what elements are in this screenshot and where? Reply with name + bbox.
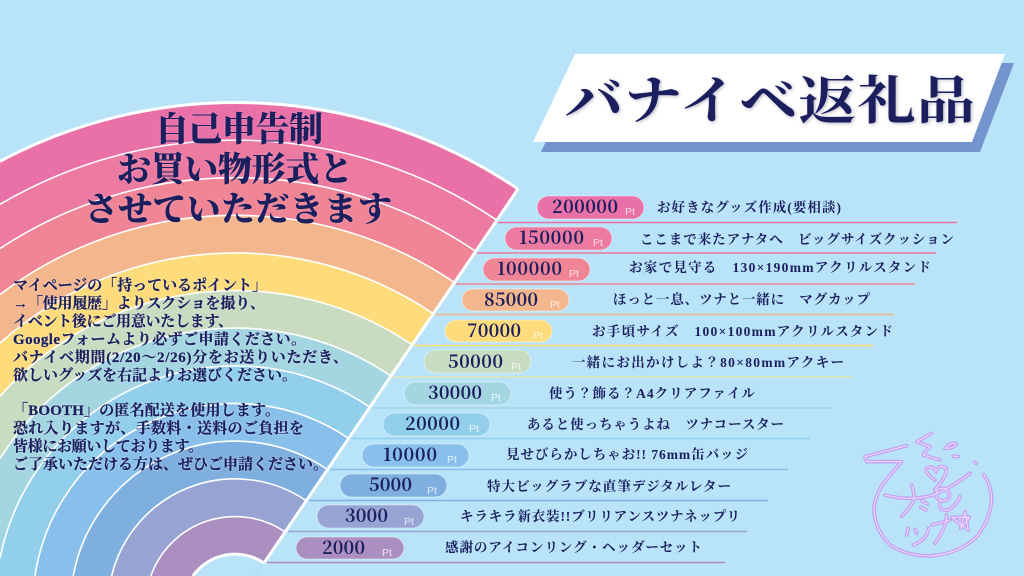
- reward row: 2000: 2000: [322, 534, 365, 560]
- reward row: 50000: Pt: [511, 361, 521, 373]
- reward row: 85000: Pt: [550, 299, 560, 311]
- heading: self-application notice: お買い物形式と: [117, 151, 353, 189]
- reward row: 200000: お好きなグッズ作成(要相談): [657, 199, 841, 215]
- reward row: 200000: [498, 193, 957, 222]
- panel: rainbow fan: [0, 103, 518, 576]
- reward row: 3000: [288, 502, 747, 532]
- icon: handwritten signature: [865, 433, 992, 556]
- reward row: 200000: 200000: [552, 193, 618, 219]
- reward row: 2000: Pt: [382, 547, 392, 559]
- text block: shipping notes: 「BOOTH」の匿名配送を使用します。: [13, 401, 280, 419]
- text block: how to apply: 欲しいグッズを右記よりお選びください。: [13, 366, 297, 384]
- reward row: 2000: [267, 534, 725, 562]
- reward row: 2000: 感謝のアイコンリング・ヘッダーセット: [445, 539, 702, 555]
- text block: how to apply: [13, 276, 348, 384]
- reward row: 200000: Pt: [625, 206, 635, 218]
- reward row: 10000: 10000: [383, 441, 437, 467]
- reward row: 3000: Pt: [404, 516, 414, 528]
- reward row: 85000: 85000: [484, 286, 538, 312]
- text block: how to apply: Googleフォームより必ずご申請ください。: [13, 330, 306, 348]
- heading: self-application notice: させていただきます: [84, 192, 392, 229]
- title banner: バナイベ返礼品: [565, 73, 975, 130]
- heading: self-application notice: 自己申告制: [155, 111, 323, 149]
- reward row: 10000: 見せびらかしちゃお!! 76mm缶バッジ: [506, 446, 748, 462]
- text block: shipping notes: [13, 401, 328, 473]
- reward row: 150000: [477, 224, 954, 253]
- reward row: 150000: ここまで来たアナタへ ビッグサイズクッション: [640, 231, 954, 247]
- text block: shipping notes: 皆様にお願いしております。: [13, 437, 203, 455]
- reward row: 150000: Pt: [593, 237, 603, 249]
- text block: how to apply: バナイベ期間(2/20～2/26)分をお送りいただき、: [13, 348, 348, 366]
- reward row: 30000: 30000: [428, 379, 482, 405]
- reward row: 30000: [372, 379, 831, 408]
- text block: shipping notes: 恐れ入りますが、手数料・送料のご負担を: [13, 419, 304, 437]
- reward row: 70000: Pt: [533, 330, 543, 342]
- reward row: 5000: Pt: [427, 485, 437, 497]
- reward row: 100000: [456, 255, 931, 284]
- reward row: 50000: [393, 348, 853, 377]
- reward row: 10000: [330, 441, 788, 470]
- reward row: 100000: 100000: [497, 255, 562, 281]
- reward row: 150000: 150000: [519, 224, 584, 250]
- reward row: 10000: Pt: [447, 454, 457, 466]
- reward row: 50000: 一緒にお出かけしよ？80×80mmアクキー: [572, 354, 844, 370]
- reward row: 20000: 20000: [405, 410, 460, 436]
- reward row: 5000: 5000: [369, 471, 412, 497]
- text block: how to apply: マイページの「持っているポイント」: [13, 276, 267, 294]
- reward row: 70000: [414, 317, 893, 346]
- reward row: 5000: [309, 471, 768, 500]
- reward row: 85000: [435, 286, 894, 314]
- reward row: 100000: お家で見守る 130×190mmアクリルスタンド: [629, 259, 931, 275]
- reward row: 50000: 50000: [448, 348, 503, 374]
- reward row: 20000: [351, 410, 810, 438]
- text block: shipping notes: ご了承いただける方は、ぜひご申請ください。: [13, 455, 328, 473]
- reward row: 30000: 使う？飾る？A4クリアファイル: [549, 385, 756, 401]
- reward row: 20000: あると使っちゃうよね ツナコースター: [527, 416, 784, 432]
- reward row: 85000: ほっと一息、ツナと一緒に マグカップ: [613, 291, 870, 307]
- text block: how to apply: イベント後にご用意いたします、: [13, 312, 233, 330]
- reward row: 20000: Pt: [469, 423, 479, 435]
- reward row: 3000: キラキラ新衣装!!ブリリアンスツナネップリ: [460, 508, 740, 524]
- reward row: 5000: 特大ビッグラブな直筆デジタルレター: [487, 478, 731, 494]
- text block: how to apply: →「使用履歴」よりスクショを撮り、: [13, 294, 265, 312]
- title banner: [533, 54, 1014, 152]
- reward row: 30000: Pt: [491, 392, 501, 404]
- heading: self-application notice: [84, 111, 392, 229]
- reward row: 70000: お手頃サイズ 100×100mmアクリルスタンド: [592, 323, 893, 339]
- reward row: 70000: 70000: [467, 317, 521, 343]
- reward row: 3000: 3000: [345, 502, 388, 528]
- reward row: 100000: Pt: [569, 268, 579, 280]
